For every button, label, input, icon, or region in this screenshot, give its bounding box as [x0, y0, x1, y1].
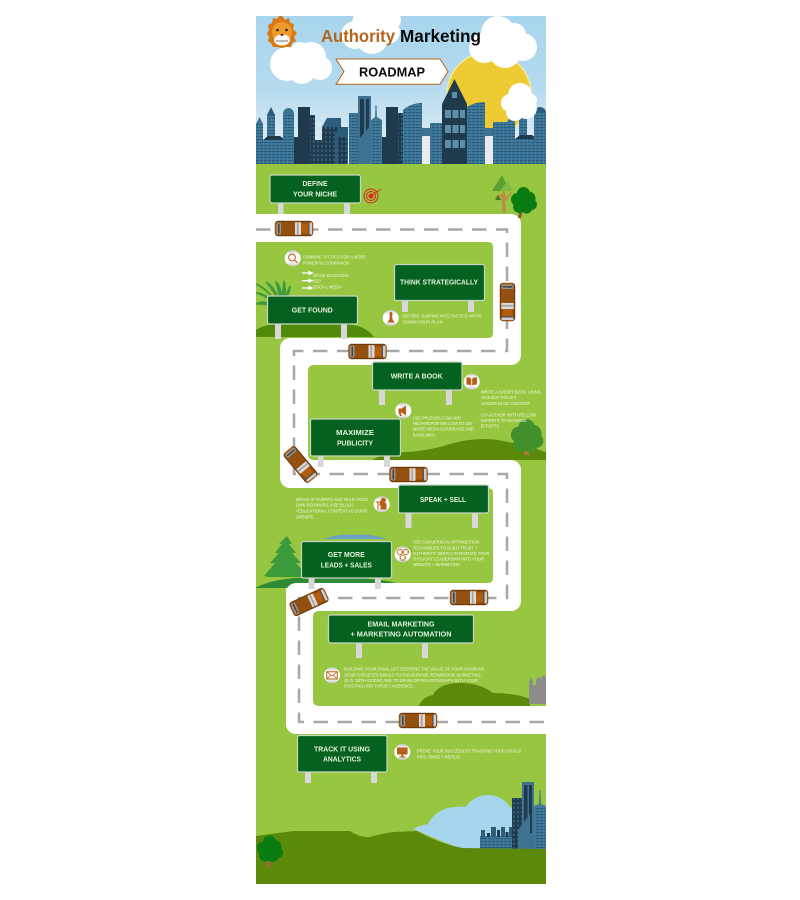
car 8: [399, 713, 437, 728]
sign: define your niche: DEFINE: [302, 179, 328, 188]
sign: write a book: [372, 362, 462, 405]
tree: round top right: [511, 187, 537, 218]
text: prleads: BACKLINKS.: [413, 432, 436, 437]
car 2: [500, 283, 515, 321]
text: prleads: USE PRLEADS.COM AND: [413, 415, 462, 420]
text: speak at events: SPEAK AT EVENTS AND HOLD YOUR: [296, 497, 369, 502]
text: conversion optimization: USE CONVERSION OPTIMIZATION: [413, 540, 479, 545]
roadmap banner: ROADMAP: [359, 66, 425, 80]
sign: email marketing: [328, 615, 474, 658]
tall city towers: [512, 782, 546, 849]
pine tree: [264, 536, 301, 577]
sign: speak and sell: SPEAK + SELL: [420, 495, 466, 504]
hill in publicity panel: [372, 439, 546, 460]
white road patch over swell: [286, 583, 403, 593]
text: combine tactics: [303, 255, 366, 266]
dark green foreground hills: [256, 831, 546, 884]
skyline: [256, 79, 546, 164]
tree: publicity panel: [511, 419, 543, 455]
sign: maximize publicity: PUBLICITY: [337, 438, 373, 447]
sun: [446, 55, 532, 128]
text: speak at events: +EDUCATIONAL CONTENT AS DOOR: [296, 508, 368, 513]
text: building your email list: EXISTING AND TARGET AUDIENCE.: [344, 684, 414, 689]
icon: chess piece: [383, 310, 399, 326]
list: tactics with arrows: NICHE BLOGGING: [313, 273, 349, 278]
text: speak at events: OPENERS.: [296, 514, 314, 519]
text: write a short book: WRITE A SHORT BOOK USING: [481, 389, 541, 394]
text: write a short book: EFFORTS: [481, 424, 499, 429]
palm tree: [256, 281, 290, 310]
tree: triangle top right: [492, 175, 513, 213]
blue ridge behind leads sign: [323, 534, 387, 539]
sign: write a book: WRITE A BOOK: [391, 372, 443, 381]
car 7: [289, 587, 329, 617]
sign: maximize publicity: [310, 419, 400, 467]
cloud: left: [270, 42, 332, 84]
sign: define your niche: YOUR NICHE: [293, 190, 337, 199]
sign: get more leads and sales: GET MORE: [328, 550, 365, 559]
factory: [529, 675, 546, 704]
text: prleads: HELPAREPORTER.COM TO GET: [413, 421, 473, 426]
white road: [256, 214, 546, 734]
icon: book: [464, 374, 480, 390]
text: conversion optimization: [413, 540, 490, 567]
sign: email marketing: EMAIL MARKETING: [368, 619, 435, 628]
text: conversion optimization: WEBSITE + MARKETING.: [413, 562, 461, 567]
sign: track it using analytics: [298, 736, 387, 783]
icon: gears: [395, 546, 411, 562]
car 6: [450, 590, 488, 605]
text: write a short book: YOUR BEST THOUGHT: [481, 395, 517, 400]
text: building your email list: [344, 667, 485, 689]
icon: megaphone: [395, 403, 411, 419]
text: prove your success: PROVE YOUR SUCCESS BY TRACKING YOUR GOALS/: [417, 749, 522, 754]
sign: define your niche: [270, 175, 360, 214]
text: building your email list: SEND TARGETED EMAILS TO ENCOURAGE PERMISSION MARKETING: [344, 672, 481, 677]
hill under email panel: [419, 683, 530, 706]
text: conversion optimization: AUTHORITY. DEEPLY INTEGRATE YOUR: [413, 551, 490, 556]
text: before jumping: BEFORE JUMPING INTO TACTICS WRITE: [403, 314, 482, 319]
text: speak at events: OWN SEMINARS, USE BLOGS: [296, 503, 354, 508]
lion logo: [267, 16, 297, 48]
text: combine tactics: COMBINE TACTICS FOR A MORE: [303, 255, 366, 260]
text: write a short book: [481, 389, 541, 429]
sign: get found: GET FOUND: [292, 306, 333, 315]
car 3: [348, 344, 386, 359]
car 1: [275, 221, 313, 236]
text: write a short book: CO-AUTHOR WITH FELLOW: [481, 413, 537, 418]
title: Authority: [321, 26, 395, 46]
list: tactics with arrows: [302, 272, 349, 290]
sign: email marketing: + MARKETING AUTOMATION: [350, 630, 452, 639]
road centre line: [256, 230, 546, 722]
text: prove your success: KPIS. RINSE + REPEAT.: [417, 754, 461, 759]
sign: get found: [268, 296, 358, 339]
ground swell under leads sign: [255, 578, 403, 588]
sign: think strategically: [394, 264, 484, 312]
text: building your email list: BUILDING YOUR EMAIL LIST DEEPENS THE VALUE OF YOUR COMPANY.: [344, 667, 485, 672]
title: Marketing: [400, 26, 481, 46]
grass background: [256, 164, 546, 884]
sign: maximize publicity: MAXIMIZE: [336, 428, 374, 437]
text: prleads: MORE MEDIA COVERAGE AND: [413, 427, 475, 432]
sign: track it using analytics: TRACK IT USING: [314, 744, 370, 753]
sky background: [256, 16, 546, 166]
icon: target: [364, 189, 381, 203]
cloud: top centre: [341, 16, 401, 54]
text: conversion optimization: THOUGHT LEADERSHIP INTO YOUR: [413, 557, 485, 562]
text: speak at events: [296, 497, 369, 519]
title: [321, 26, 481, 46]
sign: get more leads and sales: LEADS + SALES: [321, 560, 372, 569]
text: building your email list: (E.G. SETH GODIN) AND TO DEVELOP RELATIONSHIPS WITH YOUR: [344, 678, 478, 683]
sign: track it using analytics: ANALYTICS: [323, 755, 361, 764]
text: prove your success: [417, 749, 522, 759]
list: tactics with arrows: SOCIAL MEDIA: [313, 285, 343, 290]
text: combine tactics: POWERFUL COMPANION:: [303, 260, 350, 266]
hill behind get found: [256, 324, 374, 337]
car 4: [283, 445, 318, 484]
icon: monitor: [394, 744, 410, 760]
text: prleads: [413, 415, 475, 437]
sign: get more leads and sales: [302, 542, 392, 589]
tree: bottom left: [257, 836, 283, 868]
icon: envelope: [324, 667, 340, 683]
icon: speaker at podium: [374, 496, 390, 512]
sign: speak and sell: [398, 485, 488, 528]
cloud: top right: [469, 16, 537, 68]
text: conversion optimization: TECHNIQUES TO BUILD TRUST +: [413, 545, 478, 550]
roadmap banner: [336, 59, 448, 84]
icon: magnifier: [285, 250, 301, 266]
list: tactics with arrows: SEO: [313, 279, 321, 284]
small distant city: [480, 827, 522, 849]
text: write a short book: LEADER BLOG CONTENT.: [481, 401, 531, 406]
text: before jumping: [403, 314, 482, 324]
cloud: over sun: [501, 83, 537, 121]
car 5: [390, 467, 428, 482]
text: write a short book: EXPERTS TO MAXIMIZE: [481, 418, 527, 423]
text: before jumping: DOWN YOUR PLAN: [403, 319, 443, 324]
blue cloud on horizon: [413, 795, 522, 850]
sign: think strategically: THINK STRATEGICALLY: [400, 278, 478, 287]
